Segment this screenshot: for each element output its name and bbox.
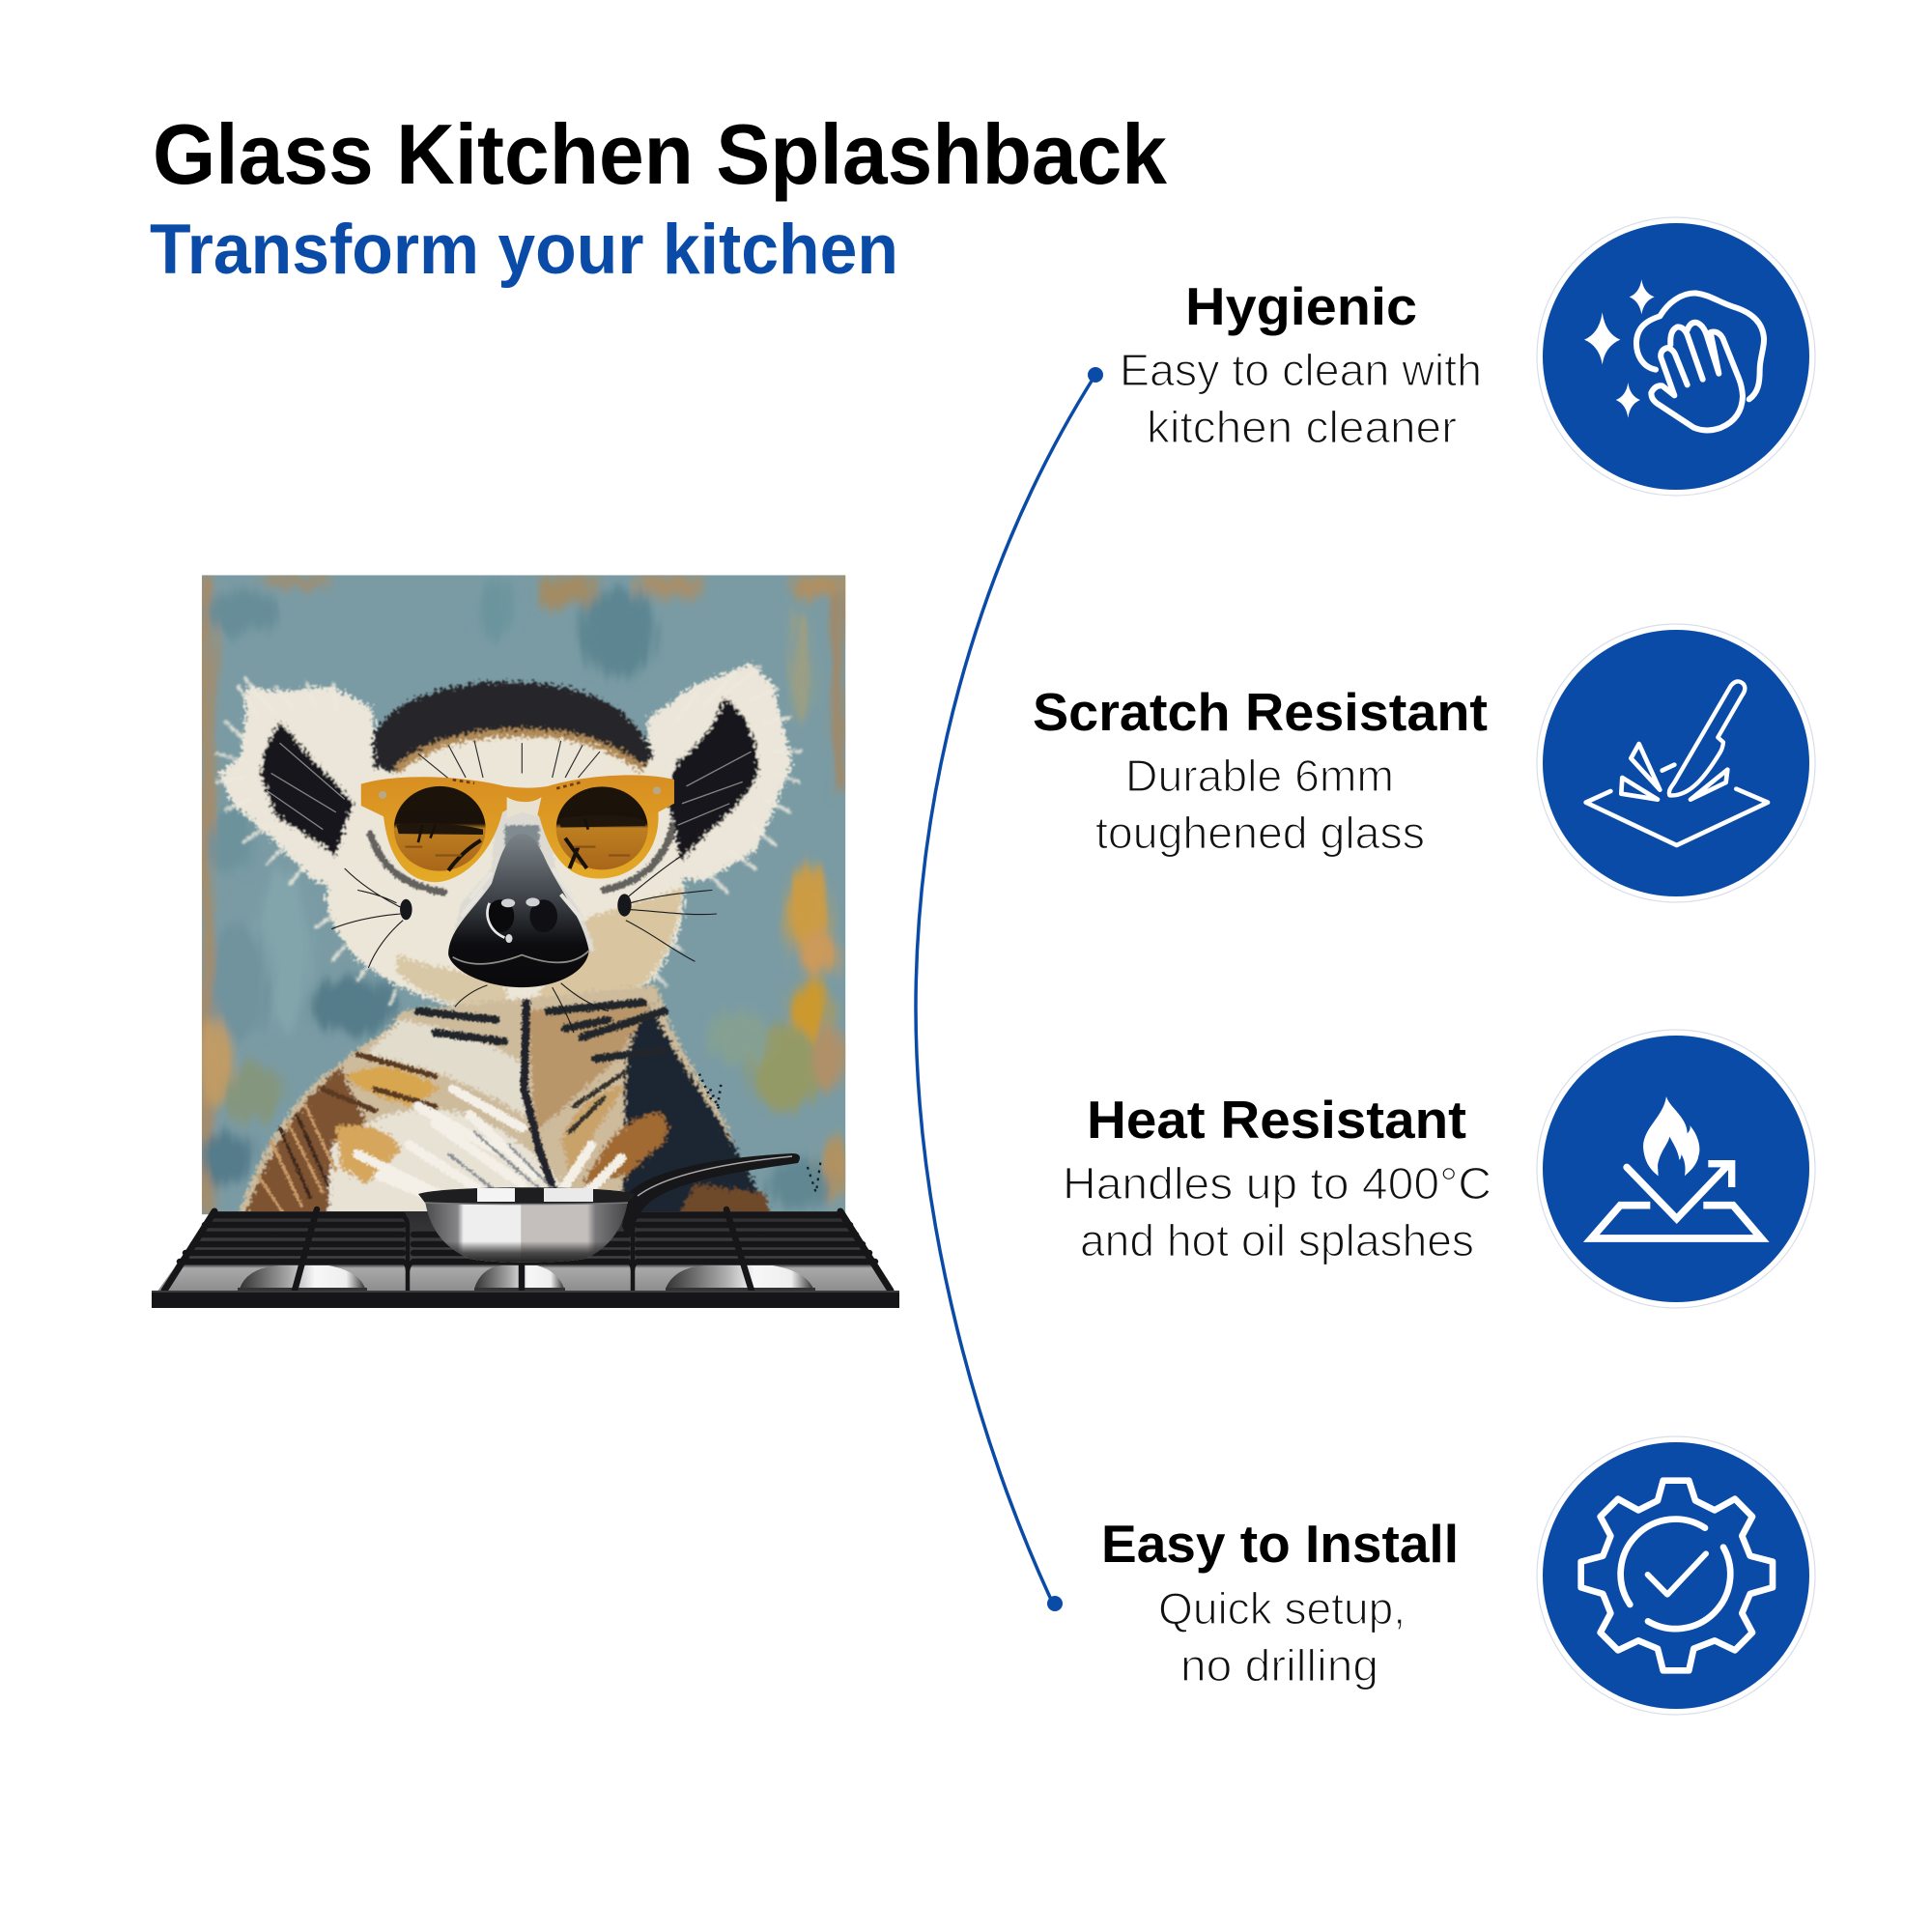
splashback artwork: lemur with sunglasses — [197, 575, 846, 1219]
description: scratch resistant — [1095, 751, 1425, 858]
dark shading under glasses — [371, 825, 673, 893]
description: heat resistant — [1063, 1158, 1492, 1265]
icon: flame deflected from surface — [1537, 1030, 1815, 1308]
description: scratch resistant: toughened glass — [1095, 808, 1425, 858]
muzzle and nose — [448, 834, 589, 987]
feature: scratch resistant — [1033, 682, 1488, 858]
title: Glass Kitchen Splashback — [153, 106, 1168, 202]
forehead black band — [373, 682, 653, 773]
description: easy to install — [1158, 1583, 1406, 1690]
description: scratch resistant: Durable 6mm — [1125, 751, 1394, 801]
right ear — [647, 663, 792, 881]
pan — [418, 1153, 800, 1263]
description: hygienic — [1120, 345, 1482, 452]
description: heat resistant: and hot oil splashes — [1080, 1215, 1474, 1265]
heading: Hygienic: Hygienic — [1185, 276, 1417, 336]
chest and body fur — [237, 985, 773, 1219]
yellow sunglasses — [361, 775, 674, 882]
fur strokes — [258, 1003, 665, 1214]
left ear — [219, 687, 380, 890]
feature: hygienic — [1120, 276, 1482, 452]
icon: hand wiping with sparkles — [1537, 217, 1815, 496]
feature: easy to install — [1101, 1514, 1459, 1690]
hob plate — [156, 1211, 895, 1293]
white bridge of the muzzle — [448, 808, 595, 955]
heading: Easy to Install: Easy to Install — [1101, 1514, 1459, 1574]
ear and cheek hair strands — [217, 668, 801, 1005]
cheek spots — [400, 899, 412, 920]
description: easy to install: Quick setup, — [1158, 1583, 1406, 1634]
grates — [164, 1209, 891, 1291]
gas hob with pan — [152, 1153, 899, 1308]
subtitle: Transform your kitchen — [150, 211, 898, 289]
description: heat resistant: Handles up to 400°C — [1063, 1158, 1492, 1208]
whiskers — [331, 856, 717, 1033]
connector curve with end dots — [916, 367, 1103, 1611]
painted background — [197, 575, 846, 1214]
feature: heat resistant — [1063, 1090, 1492, 1265]
description: easy to install: no drilling — [1180, 1640, 1378, 1690]
heading: Scratch Resistant: Scratch Resistant — [1033, 682, 1488, 742]
description: hygienic: Easy to clean with — [1120, 345, 1482, 395]
hob front edge — [152, 1291, 899, 1308]
head fur — [327, 717, 684, 1012]
heading: Heat Resistant: Heat Resistant — [1087, 1090, 1466, 1150]
burners — [238, 1265, 815, 1291]
icon: gear with check mark — [1537, 1436, 1815, 1715]
description: hygienic: kitchen cleaner — [1147, 402, 1457, 452]
fur and ears — [217, 663, 801, 1012]
icon: knife on glass — [1537, 624, 1815, 902]
